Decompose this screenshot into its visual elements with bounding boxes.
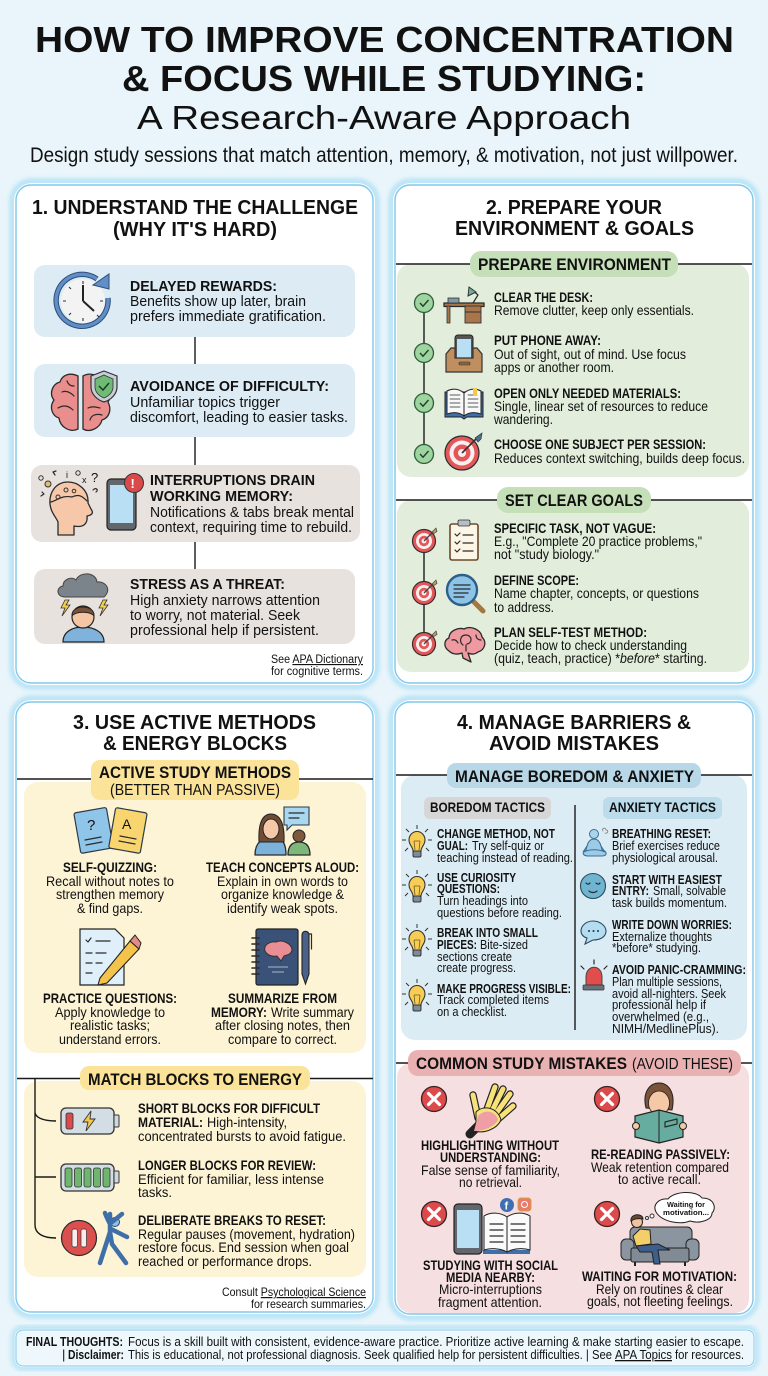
text: waiting for motivation: goals, not fleeting feelings. [587,1293,733,1309]
text: break into small pieces: PIECES: [437,937,477,952]
icon: person waiting on couch [621,1192,714,1266]
icon: check 4 [414,444,434,464]
pill: common study mistakes: (AVOID THESE) [632,1056,733,1073]
card: avoidance of difficulty [34,364,355,437]
icon: phone with notification: ! [130,476,135,491]
text: clear the desk: CLEAR THE DESK: [494,289,593,305]
icon: distracted head: ? [91,470,98,485]
icon: phone, book and social media: f [504,1200,508,1212]
section: common study mistakes [396,1050,752,1313]
text: avoid panic-cramming [612,962,746,1036]
text: avoid panic-cramming: overwhelmed (e.g., [612,1009,709,1024]
text: summarize from memory: MEMORY: [211,1004,267,1020]
text: curiosity questions: Turn headings into [437,893,528,908]
text: deliberate breaks [138,1212,355,1269]
text: short blocks: High-intensity, [207,1114,287,1130]
icon: worksheet and pencil [80,929,141,985]
icon: x mark 1 [422,1086,446,1112]
icon: full battery [61,1164,119,1191]
icon: phone in drawer [446,335,482,372]
text: deliberate breaks: DELIBERATE BREAKS TO RESET: [138,1212,326,1228]
text: practice questions: understand errors. [59,1031,161,1047]
text: make progress visible [437,981,571,1019]
section: set clear goals [396,487,752,672]
icon: person reading book [632,1083,686,1143]
text: open only needed materials: wandering. [493,411,553,427]
icon: speech bubble [581,921,606,944]
note: APA Dictionary: See APA Dictionary [271,654,363,666]
text: teach concepts aloud: identify weak spots. [227,900,338,916]
icon: highlighted hand [470,1087,513,1134]
text: highlighting without understanding: no retrieval. [459,1174,522,1190]
icon: distracted head: x [82,475,87,485]
icon: person waiting on couch: motivation... [663,1208,709,1217]
text: studying with social media: STUDYING WITH SOCIAL [423,1257,558,1273]
text: break into small pieces [437,925,538,975]
panel 2 heading [455,196,694,240]
footer text: APA Topics [615,1347,672,1362]
panel 3 heading: & ENERGY BLOCKS [103,732,287,755]
text: short blocks: concentrated bursts to avoid fatigue. [138,1128,346,1144]
icon: phone with notification [107,474,144,530]
text: clear the desk [494,289,694,318]
pill: active study methods [91,760,299,800]
footer text: FINAL THOUGHTS: [26,1334,123,1349]
icon: bulb 1 [402,825,432,857]
text: summarize from memory [211,990,354,1047]
text: break into small pieces: Bite-sized [480,937,528,952]
text: practice questions [43,990,177,1047]
icon: small target 3 [412,631,437,656]
icon: check 1 [414,294,434,312]
text: interruptions: INTERRUPTIONS DRAIN [150,472,315,489]
icon: bulb 2 [402,870,432,902]
icon: check 3 [414,394,434,412]
text: studying with social media: fragment attention. [438,1294,542,1310]
icon: notebook with brain and pen [252,929,312,985]
text: start with easiest entry [612,872,727,910]
text: longer blocks: tasks. [138,1184,172,1200]
text: re-reading passively: RE-READING PASSIVELY: [591,1146,730,1162]
panel 3 heading: 3. USE ACTIVE METHODS [73,711,316,734]
text: self-quizzing: Recall without notes to [46,873,174,889]
text: avoidance of difficulty: Unfamiliar topics trigger [130,394,280,411]
icon: target with arrow [445,433,482,470]
panel: 3 use active methods and energy blocks [12,698,377,1316]
text: self-quizzing: strengthen memory [56,886,164,902]
panel 4 heading: AVOID MISTAKES [489,732,659,755]
panel: 4 manage barriers and avoid mistakes [391,698,757,1318]
title block: & FOCUS WHILE STUDYING: [122,58,646,99]
icon: teaching people [255,807,310,855]
text: waiting for motivation: WAITING FOR MOTIVATION: [582,1268,737,1284]
pill: active study methods: ACTIVE STUDY METHODS [99,764,291,782]
icon: stressed person under cloud [58,574,108,642]
text: short blocks: MATERIAL: [138,1114,203,1130]
text: write down worries: Externalize thoughts [612,929,712,944]
icon: bulb 3 [402,924,432,956]
pill: active study methods: (BETTER THAN PASSIVE) [110,782,280,799]
text: longer blocks [138,1157,324,1200]
text: specific task: E.g., "Complete 20 practice problems," [494,533,702,549]
text: highlighting without understanding: False sense of familiarity, [421,1162,560,1178]
text: choose one subject [494,436,745,466]
icon: check 2 [414,344,434,362]
text: short blocks [138,1100,346,1144]
icon: brain with question [445,628,485,662]
text: teach concepts aloud: TEACH CONCEPTS ALOUD: [206,859,359,875]
text: studying with social media [423,1257,558,1310]
text: change method: GUAL: [437,838,468,853]
pill: common study mistakes [408,1050,741,1076]
text: start with easiest entry: task builds momentum. [612,895,727,910]
section: match blocks to energy [17,1066,373,1277]
text: summarize from memory: Write summary [271,1004,354,1020]
text: self-quizzing: & find gaps. [77,900,143,916]
text: interruptions [150,472,354,536]
text: define scope [494,572,699,615]
text: avoidance of difficulty: discomfort, leading to easier tasks. [130,409,348,426]
footer text [26,1334,744,1362]
text: breathing reset: physiological arousal. [612,850,718,865]
icon: phone, book and social media [454,1198,531,1254]
text: change method: teaching instead of reading. [437,850,573,865]
text: open only needed materials: Single, linear set of resources to reduce [494,398,708,414]
text: put phone away: PUT PHONE AWAY: [494,332,601,348]
text: self-quizzing [46,859,174,916]
text: write down worries: WRITE DOWN WORRIES: [612,917,732,932]
text: curiosity questions: QUESTIONS: [437,881,500,896]
text: delayed rewards: DELAYED REWARDS: [130,278,277,295]
section: prepare environment [396,251,752,477]
text: delayed rewards: prefers immediate gratification. [130,308,326,325]
text: specific task: SPECIFIC TASK, NOT VAGUE: [494,520,656,536]
icon: flashcards: ? [87,817,95,834]
text: define scope: DEFINE SCOPE: [494,572,579,588]
pill: prepare environment: PREPARE ENVIRONMENT [478,256,671,274]
pill: anxiety tactics: ANXIETY TACTICS [609,799,716,815]
text: breathing reset: BREATHING RESET: [612,826,711,841]
text: practice questions: PRACTICE QUESTIONS: [43,990,177,1006]
panel 1 heading [32,196,358,241]
arrow: branching tree connector [35,1079,56,1238]
text: open only needed materials [493,385,708,427]
icon: distracted head: i [66,470,68,480]
text: break into small pieces: BREAK INTO SMALL [437,925,538,940]
icon: flashcards [74,807,147,853]
icon: small target 1 [412,528,437,552]
text: avoidance of difficulty: AVOIDANCE OF DIFFICULTY: [130,378,329,395]
pill: match blocks to energy [80,1066,310,1090]
text: break into small pieces: create progress. [437,960,516,975]
pill: boredom tactics [424,797,551,819]
pill: manage boredom and anxiety: MANAGE BOREDOM & ANXIETY [455,768,694,786]
text: breathing reset: Brief exercises reduce [612,838,720,853]
icon: bulb 4 [402,979,432,1011]
text: interruptions: Notifications & tabs break mental [150,504,354,521]
text: summarize from memory: compare to correct. [228,1031,337,1047]
text: write down worries: *before* studying. [612,940,701,955]
text: studying with social media: MEDIA NEARBY: [446,1269,535,1285]
panel 3 heading [73,711,316,755]
pill: set clear goals: SET CLEAR GOALS [505,492,643,510]
panel 1 heading: 1. UNDERSTAND THE CHALLENGE [32,196,358,219]
footer text: This is educational, not professional diagnosis. Seek qualified help for persistent difficulties. | See [128,1347,612,1362]
text: plan self-test method: (quiz, teach, practice) *before* starting. [494,650,707,666]
text: make progress visible: Track completed items [437,992,549,1007]
icon: stretching figure [100,1213,127,1263]
pill: boredom tactics: BOREDOM TACTICS [430,799,545,815]
text: delayed rewards [130,278,326,325]
card: interruptions drain working memory [31,465,360,542]
icon: person waiting on couch: Waiting for [667,1200,705,1209]
text: highlighting without understanding: UNDERSTANDING: [440,1149,541,1165]
section: manage boredom and anxiety [396,763,752,1040]
pill: match blocks to energy: MATCH BLOCKS TO ENERGY [88,1071,302,1089]
icon: desk [444,287,484,323]
text: avoid panic-cramming: NIMH/MedlinePlus). [612,1021,719,1036]
icon: distracted head [39,470,98,535]
text: teach concepts aloud: Explain in own words to [217,873,348,889]
text: summarize from memory: after closing notes, then [215,1017,350,1033]
note: psychological science: Consult Psychological Science [222,1285,366,1299]
icon: clipboard [450,520,478,560]
icon: meditating person [583,828,608,856]
text: change method [437,826,573,865]
text: start with easiest entry: ENTRY: [612,883,649,898]
text: longer blocks: LONGER BLOCKS FOR REVIEW: [138,1157,316,1173]
footer text: for resources. [675,1347,744,1362]
text: avoid panic-cramming: avoid all-nighters. Seek [612,986,726,1001]
text: avoidance of difficulty [130,378,348,426]
icon: siren [581,960,607,990]
panel 4 heading [457,711,691,755]
text: teach concepts aloud: organize knowledge & [221,886,345,902]
pill: anxiety tactics [603,797,722,819]
text: stress as a threat: STRESS AS A THREAT: [130,576,285,593]
icon: brain with shield [52,371,117,430]
panel 2 heading: ENVIRONMENT & GOALS [455,217,694,240]
text: re-reading passively: to active recall. [618,1171,701,1187]
text: choose one subject: CHOOSE ONE SUBJECT PER SESSION: [494,436,706,452]
text: re-reading passively [591,1146,730,1187]
text: summarize from memory: SUMMARIZE FROM [228,990,337,1006]
text: avoid panic-cramming: Plan multiple sessions, [612,974,722,989]
text: waiting for motivation: Rely on routines & clear [596,1281,723,1297]
panel: 1 understand the challenge [12,181,377,687]
text: practice questions: Apply knowledge to [55,1004,165,1020]
text: clear the desk: Remove clutter, keep only essentials. [494,302,694,318]
text: specific task [494,520,702,562]
icon: x mark 2 [594,1086,620,1112]
footer text: Disclaimer: [68,1347,124,1362]
card: delayed rewards [34,265,355,337]
icon: magnifier [447,575,483,611]
title block [30,19,738,167]
text: write down worries [612,917,732,955]
text: highlighting without understanding [421,1137,560,1190]
text: highlighting without understanding: HIGHLIGHTING WITHOUT [421,1137,559,1153]
text: breathing reset [612,826,720,865]
text: make progress visible: MAKE PROGRESS VISIBLE: [437,981,571,996]
panel 1 heading: (WHY IT'S HARD) [113,218,277,241]
text: define scope: Name chapter, concepts, or questions [494,585,699,601]
text: curiosity questions: questions before reading. [437,905,562,920]
text: deliberate breaks: restore focus. End session when goal [138,1239,349,1255]
text: self-quizzing: SELF-QUIZZING: [63,859,157,875]
text: teach concepts aloud [206,859,359,916]
text: change method: CHANGE METHOD, NOT [437,826,555,841]
text: define scope: to address. [494,599,554,615]
icon: small target 2 [412,580,437,604]
pill: common study mistakes: COMMON STUDY MISTAKES [416,1055,627,1073]
text: put phone away: apps or another room. [494,359,614,375]
text: plan self-test method [494,624,707,666]
text: plan self-test method: Decide how to check understanding [494,637,687,653]
text: short blocks: SHORT BLOCKS FOR DIFFICULT [138,1100,320,1116]
panel: 2 prepare your environment and goals [391,181,757,687]
text: deliberate breaks: reached or performance drops. [138,1253,312,1269]
pill: set clear goals [497,487,651,513]
note: APA Dictionary: for cognitive terms. [271,666,363,678]
text: break into small pieces: sections create [437,949,512,964]
text: avoid panic-cramming: professional help if [612,997,706,1012]
card: stress as a threat [34,569,355,644]
pill: prepare environment [470,251,678,277]
panel 2 heading: 2. PREPARE YOUR [486,196,662,219]
panel 4 heading: 4. MANAGE BARRIERS & [457,711,691,734]
icon: x mark 3 [422,1202,446,1226]
text: stress as a threat: professional help if persistent. [130,622,319,639]
title block: HOW TO IMPROVE CONCENTRATION [35,19,734,60]
text: stress as a threat: High anxiety narrows attention [130,592,320,609]
icon: flashcards: A [122,816,132,832]
text: put phone away: Out of sight, out of mind. Use focus [494,346,686,362]
text: open only needed materials: OPEN ONLY NEEDED MATERIALS: [494,385,681,401]
icon: x mark 4 [594,1202,620,1226]
icon: low battery [61,1108,119,1134]
panel: final thoughts footer [13,1327,757,1369]
pill: manage boredom and anxiety [447,763,701,788]
section: active study methods [17,760,373,1053]
text: delayed rewards: Benefits show up later, brain [130,293,306,310]
note: APA Dictionary [271,654,363,678]
text: interruptions: context, requiring time to rebuild. [150,519,352,536]
title block: A Research-Aware Approach [137,99,631,136]
text: curiosity questions: USE CURIOSITY [437,870,516,885]
icon: clock with circular arrow [56,274,109,326]
text: re-reading passively: Weak retention compared [591,1159,729,1175]
text: stress as a threat: to worry, not material. Seek [130,607,300,624]
text: waiting for motivation [582,1268,737,1309]
text: start with easiest entry: START WITH EASIEST [612,872,722,887]
text: change method: Try self-quiz or [472,838,545,853]
text: interruptions: WORKING MEMORY: [150,488,293,505]
text: practice questions: realistic tasks; [70,1017,150,1033]
text: stress as a threat [130,576,320,639]
text: specific task: not "study biology." [494,546,599,562]
icon: calm face [580,874,606,898]
note: psychological science [222,1285,366,1311]
text: curiosity questions [437,870,562,920]
text: studying with social media: Micro-interruptions [439,1281,542,1297]
text: longer blocks: Efficient for familiar, less intense [138,1171,324,1187]
footer text: | [62,1347,65,1362]
text: plan self-test method: PLAN SELF-TEST METHOD: [494,624,647,640]
text: deliberate breaks: Regular pauses (movement, hydration) [138,1226,355,1242]
note: psychological science: for research summaries. [251,1297,366,1311]
text: put phone away [494,332,686,375]
text: start with easiest entry: Small, solvable [653,883,726,898]
text: make progress visible: on a checklist. [437,1004,507,1019]
icon: pause button [62,1220,96,1256]
icon: open book [445,388,483,419]
